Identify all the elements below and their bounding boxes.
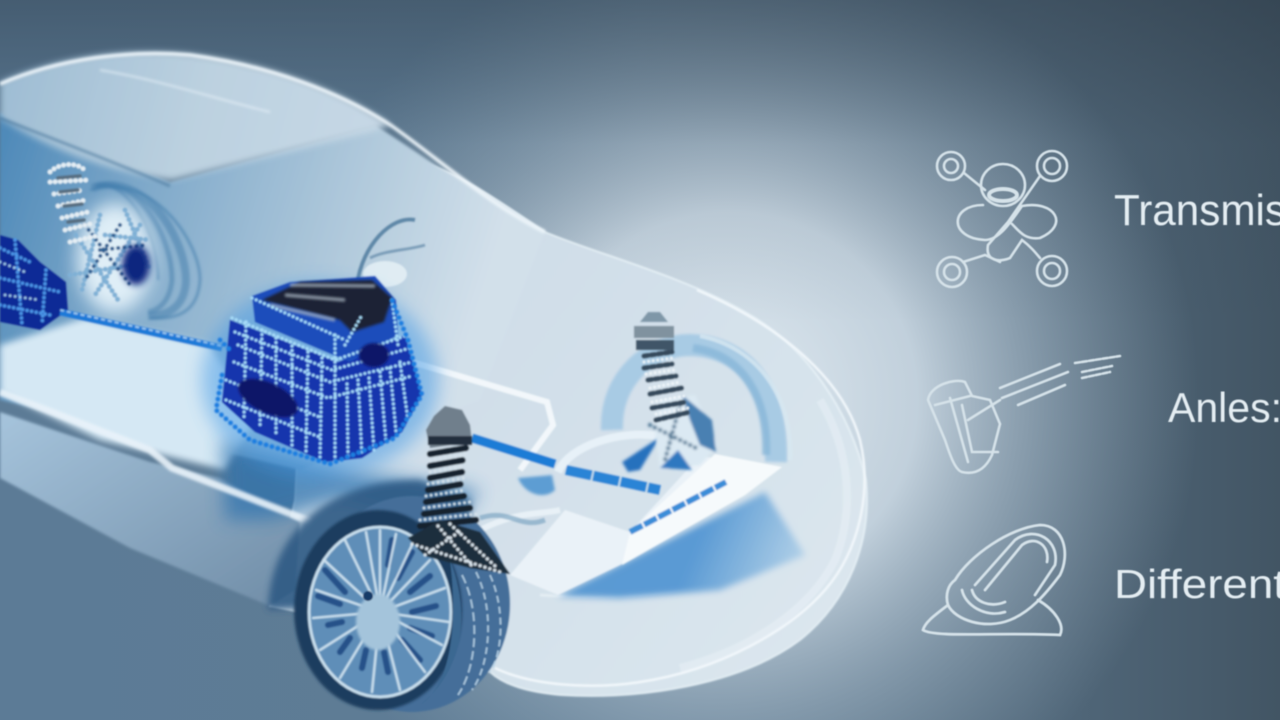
- wheel well: [268, 480, 470, 610]
- front coil spring: [634, 312, 690, 420]
- near wheel: [268, 480, 510, 712]
- icon: axle: [928, 356, 1120, 473]
- drive shaft rear: [60, 310, 222, 348]
- interior bright floor: [0, 318, 255, 470]
- roof highlights: [0, 54, 545, 232]
- engine blue bead rim: [216, 300, 422, 464]
- tyre dark side: [294, 510, 462, 710]
- door below sill: [0, 412, 300, 606]
- side interior: [0, 112, 545, 470]
- hub: [356, 594, 400, 650]
- engine bead lattice: [226, 298, 412, 462]
- car transparent body: [0, 52, 867, 696]
- car illustration: [0, 52, 867, 712]
- front wheel arc: [612, 336, 790, 462]
- front under body shadow: [558, 492, 805, 598]
- tyre inner side: [420, 560, 461, 705]
- rim spokes: [313, 530, 449, 692]
- engine dark hollows: [233, 343, 389, 425]
- bonnet frame: [412, 362, 553, 470]
- engine block: [222, 320, 422, 462]
- near coil spring: [408, 406, 510, 574]
- label: Different: Different: [1114, 561, 1280, 607]
- rear wheel arch ribs: [90, 185, 200, 318]
- front translucent walls: [495, 290, 865, 686]
- side dark shoulder line: [0, 118, 170, 186]
- steering hoop: [357, 219, 425, 287]
- sill highlight: [0, 392, 312, 522]
- dark engine top: [262, 280, 392, 332]
- front shaft and loop: [472, 435, 660, 530]
- nose and mid shell: [270, 155, 867, 696]
- engine: [202, 276, 438, 478]
- front hub: [650, 395, 718, 470]
- tyre tread: [314, 496, 510, 712]
- rear drive unit: [0, 235, 68, 330]
- rear hub: [70, 203, 153, 313]
- icon: differential: [923, 525, 1065, 635]
- rim dark gaps: [318, 540, 436, 672]
- icon: transmission: [937, 151, 1067, 287]
- roof band: [0, 52, 390, 180]
- rim: [309, 527, 451, 697]
- front chassis tray: [510, 454, 782, 595]
- dark blue cavity under engine: [222, 440, 480, 530]
- rear coil spring: [50, 164, 96, 242]
